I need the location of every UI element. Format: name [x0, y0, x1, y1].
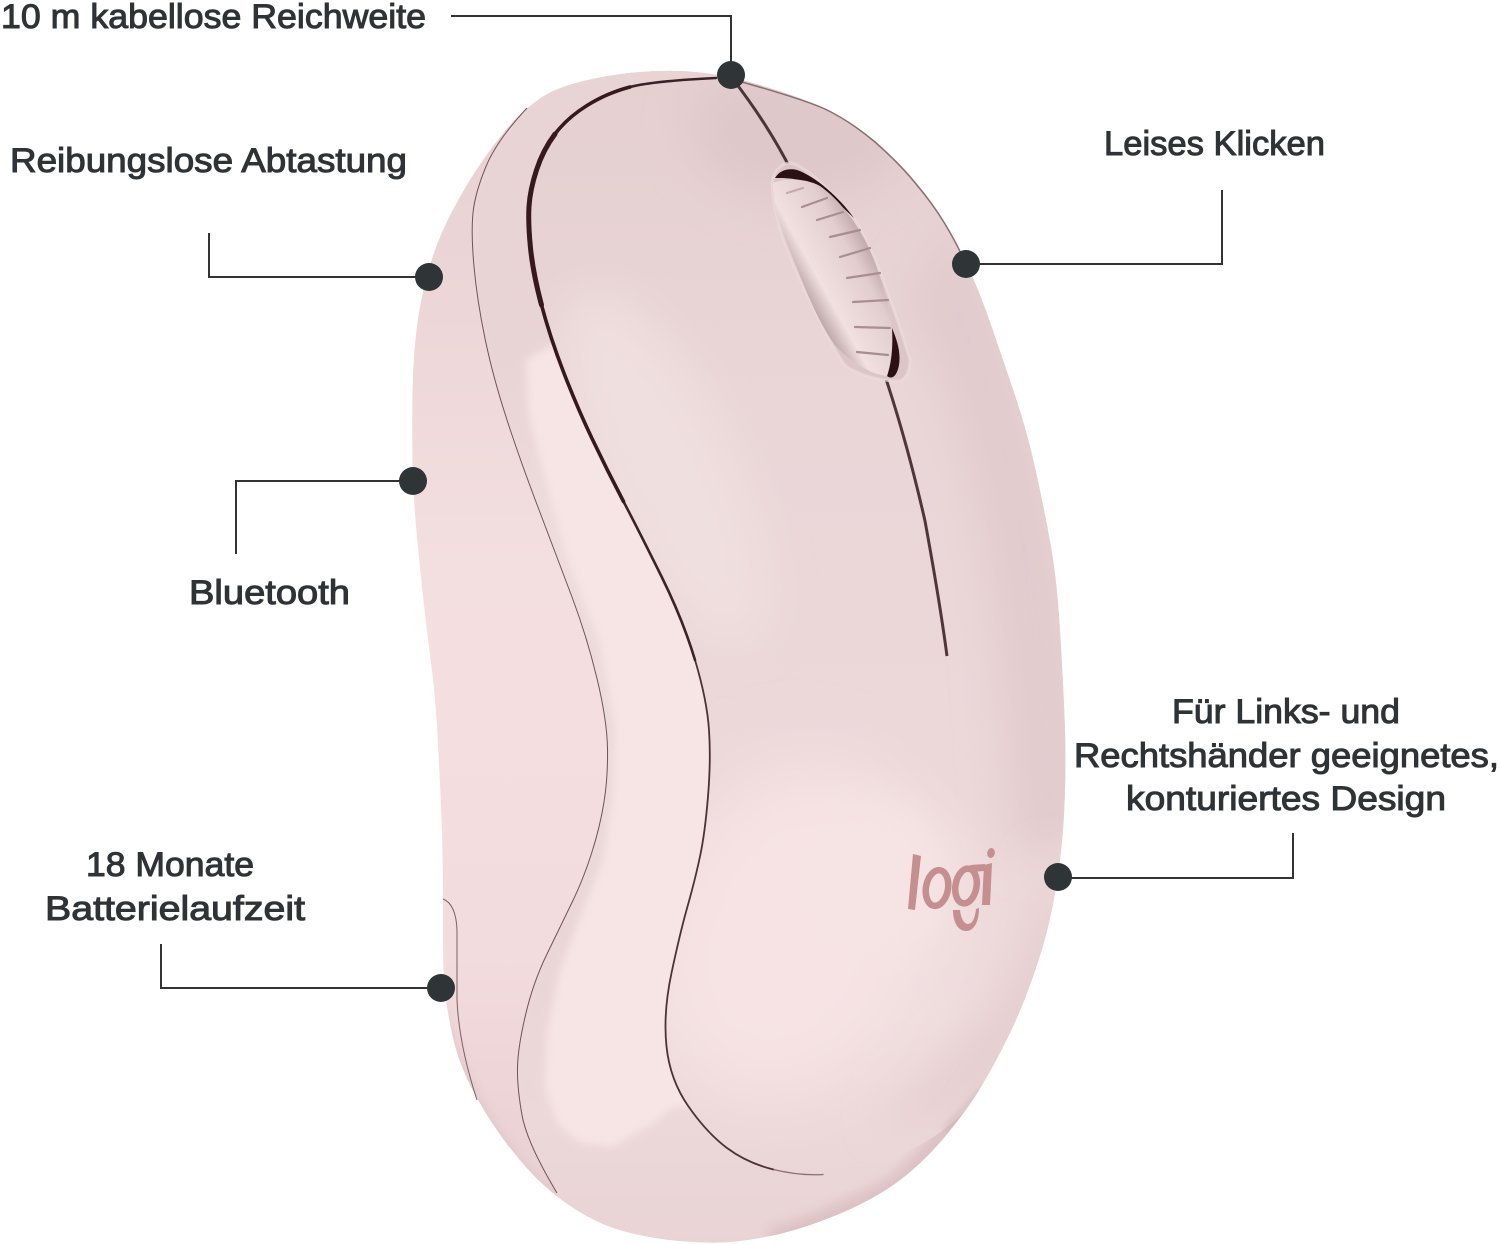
logo letter g bowl: [953, 867, 979, 905]
label line 1: Für Links- und: [1172, 693, 1400, 731]
shell bottom fading line: [774, 1170, 824, 1175]
leader line: [1058, 833, 1293, 878]
leader line: [161, 944, 441, 988]
palm highlight: [693, 793, 849, 1040]
logo letter g ear: [970, 864, 985, 872]
top right thin seam: [731, 79, 963, 258]
recess shadow bottom: [887, 328, 900, 378]
label: Bluetooth: [189, 574, 350, 612]
logo letter i: [982, 863, 992, 905]
shell outline medium: [529, 78, 716, 660]
battery door line: [443, 899, 477, 1100]
lower right shade: [940, 921, 1049, 1094]
shell lower right edge: [944, 1090, 979, 1128]
mouse illustration: [412, 40, 1100, 1245]
top shell: [556, 74, 1066, 1144]
callout: Für Links- und Rechtshänder: [1044, 693, 1499, 891]
marker: [1044, 863, 1072, 891]
label line 3: konturiertes Design: [1126, 780, 1446, 818]
leader line: [451, 16, 731, 74]
palm core highlight: [805, 800, 955, 960]
mouse base body: [412, 71, 1065, 1243]
logo dot: [986, 847, 996, 859]
logo letter l: [908, 854, 921, 910]
leader line: [236, 481, 413, 554]
marker: [427, 974, 455, 1002]
recess shadow top: [775, 169, 854, 218]
shell outline thin: [529, 78, 774, 1170]
grip panel light area: [528, 346, 688, 1147]
callout: Reibungslose Abtastung: [10, 142, 443, 291]
logo: [908, 847, 996, 931]
label line 2: Batterielaufzeit: [45, 890, 306, 928]
callout: 10 m kabellose Reichweite: [1, 0, 745, 89]
label: Leises Klicken: [1104, 125, 1325, 163]
leader line: [966, 190, 1222, 264]
callout: Bluetooth: [189, 467, 427, 612]
shell outline thick: [529, 87, 630, 502]
marker: [952, 250, 980, 278]
upper dark shading: [722, 89, 875, 178]
marker: [399, 467, 427, 495]
label line 2: Rechtshänder geeignetes,: [1074, 737, 1499, 775]
marker: [717, 61, 745, 89]
center seam top: [732, 78, 791, 170]
lower left edge shade: [452, 1034, 558, 1197]
right side shade: [934, 284, 1066, 844]
grip panel shaded band: [473, 71, 916, 1242]
callout: Leises Klicken: [952, 125, 1325, 278]
logo letter g tail: [953, 908, 979, 931]
underside edge shade: [768, 1112, 964, 1236]
center seam bottom: [885, 376, 947, 656]
scroll wheel: [773, 180, 892, 376]
label line 1: 18 Monate: [86, 846, 254, 884]
central highlight: [583, 320, 730, 592]
scroll wheel recess: [772, 163, 910, 381]
shell outline heaviest: [529, 134, 555, 305]
label: Reibungslose Abtastung: [10, 142, 407, 180]
leader line: [209, 233, 429, 277]
wheel ribs: [787, 188, 890, 355]
callout: 18 Monate Batterielaufzeit: [45, 846, 455, 1002]
grip seam line: [472, 108, 608, 1193]
marker: [415, 263, 443, 291]
logo letter o: [923, 868, 951, 908]
